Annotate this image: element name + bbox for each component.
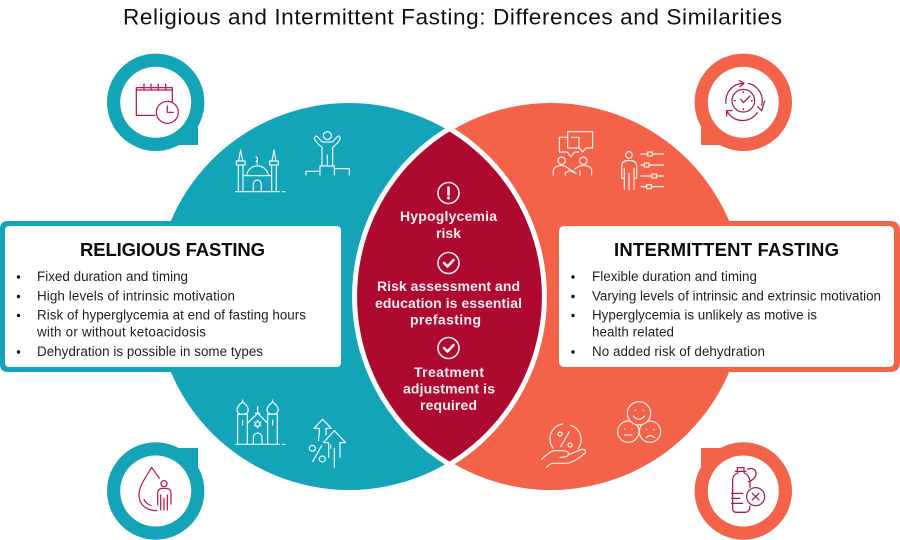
panel: religious fasting	[0, 221, 345, 372]
text: risk assessment	[375, 278, 522, 328]
circle: intermittent fasting	[358, 103, 744, 490]
panel: overlap lens	[357, 132, 542, 462]
bullets: religious fasting: with or without ketoacidosis	[36, 324, 206, 340]
text: hypoglycemia risk: risk	[436, 225, 461, 241]
bullets: intermittent fasting: No added risk of dehydration	[592, 344, 765, 359]
icon: clock with cycle arrows	[726, 81, 765, 121]
bullets: intermittent fasting: Hyperglycemia is unlikely as motive is	[592, 308, 817, 322]
icon: percent in hand	[542, 424, 586, 467]
icon: exclamation	[438, 182, 459, 204]
text: hypoglycemia risk: Hypoglycemia	[400, 208, 497, 224]
text: treatment adjustment: adjustment is	[403, 380, 495, 396]
text: risk assessment: Risk assessment and	[377, 278, 520, 294]
text: treatment adjustment: required	[420, 397, 477, 413]
bullets: intermittent fasting: Varying levels of intrinsic and extrinsic motivation	[592, 288, 881, 304]
icon: synagogue	[236, 400, 285, 444]
circle: religious fasting	[156, 103, 542, 490]
icon: calendar with clock	[136, 84, 178, 123]
bubble: bottle	[695, 442, 792, 540]
icon: two people talking	[553, 132, 593, 175]
icon: check one	[438, 252, 459, 274]
text: risk assessment: prefasting	[410, 312, 481, 328]
text: treatment adjustment: Treatment	[414, 364, 484, 380]
icon: three faces	[618, 402, 661, 442]
text: treatment adjustment	[403, 364, 495, 413]
icon: water drop and person	[139, 467, 171, 511]
bullets: religious fasting: Dehydration is possible in some types	[37, 344, 263, 359]
bubble: drop and person	[107, 442, 204, 540]
icon: person with sliders	[622, 152, 663, 189]
bullets: religious fasting: High levels of intrinsic motivation	[37, 288, 235, 304]
bullets: religious fasting: Fixed duration and timing	[37, 269, 188, 284]
bullets: religious fasting: Risk of hyperglycemia at end of fasting hours	[37, 308, 306, 322]
bubble: clock	[695, 54, 792, 151]
bullets: intermittent fasting: Flexible duration and timing	[592, 269, 757, 284]
icon: rising arrows with percent	[309, 419, 346, 467]
panel: intermittent fasting	[552, 221, 900, 372]
bubble: calendar	[107, 54, 204, 151]
icon: check two	[438, 338, 459, 358]
bullets: intermittent fasting: health related	[592, 324, 674, 340]
heading: religious fasting: RELIGIOUS FASTING	[80, 239, 265, 260]
icon: person on podium	[306, 132, 349, 175]
bullets: religious fasting	[17, 269, 306, 359]
icon: water bottle with cross	[732, 468, 765, 512]
icon: mosque	[236, 150, 285, 192]
text: risk assessment: education is essential	[375, 295, 522, 311]
bullets: intermittent fasting	[571, 269, 881, 359]
heading: intermittent fasting: INTERMITTENT FASTING	[614, 239, 839, 260]
text: hypoglycemia risk	[400, 208, 497, 241]
title: Religious and Intermittent Fasting: Differences and Similarities	[123, 4, 782, 30]
